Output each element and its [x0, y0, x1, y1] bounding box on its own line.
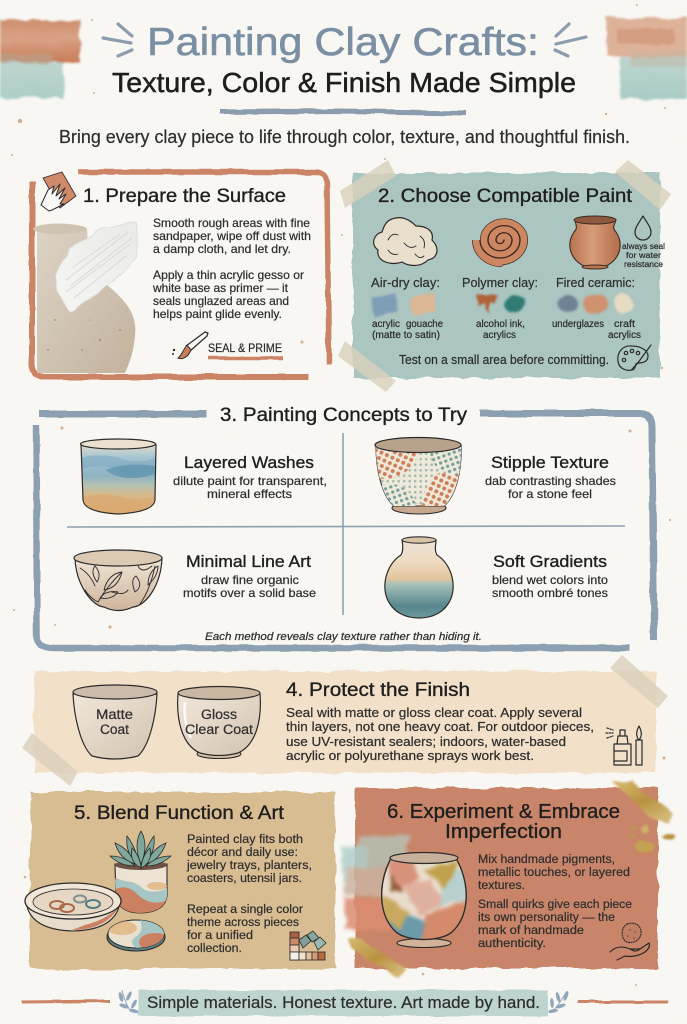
description	[173, 474, 327, 501]
description: mineral effects	[207, 487, 292, 501]
description: draw fine organic	[201, 573, 299, 587]
tagline: Bring every clay piece to life through color, texture, and thoughtful finish.	[59, 126, 630, 147]
body text: a damp cloth, and let dry.	[153, 242, 291, 256]
label underline	[208, 356, 283, 360]
body text	[478, 852, 632, 950]
body text: acrylic or polyurethane sprays work best.	[286, 749, 534, 763]
title block	[59, 21, 630, 147]
description: dilute paint for transparent,	[173, 474, 327, 488]
body text	[186, 832, 312, 955]
grid dividers	[67, 433, 625, 615]
watercolor patches	[342, 836, 408, 930]
swatch captions: underglazes	[552, 319, 604, 330]
footer rule: left	[22, 1001, 110, 1002]
swatch captions: craft	[614, 319, 635, 330]
body text: jewelry trays, planters,	[186, 858, 312, 872]
panel background	[353, 173, 660, 378]
icon: coaster	[107, 920, 171, 951]
water resistance note: resistance	[624, 259, 663, 269]
body text: metallic touches, or layered	[478, 865, 630, 879]
icon: fired ceramic pot	[570, 216, 620, 269]
title accent strokes: right	[555, 24, 586, 56]
water resistance note: for water	[626, 250, 661, 260]
panel 5: blend function and art	[25, 792, 335, 969]
swatch captions: (matte to satin)	[372, 330, 440, 341]
body text: Seal with matte or gloss clear coat. Apply several	[286, 706, 582, 720]
panel background	[34, 671, 656, 773]
description	[485, 474, 616, 501]
body text: white base as primer — it	[152, 281, 289, 295]
paint swatches	[372, 293, 634, 317]
panel background	[30, 792, 335, 969]
heading: Layered Washes	[184, 453, 314, 472]
icon: leaf sprig right	[548, 991, 569, 1014]
heading: 5. Blend Function & Art	[74, 802, 285, 824]
heading	[387, 801, 620, 843]
heading: Minimal Line Art	[186, 552, 311, 571]
icon: spray bottle and brush	[606, 726, 642, 765]
title line: Painting Clay Crafts:	[147, 21, 539, 64]
icon: hand holding stone	[610, 923, 650, 960]
vase photo	[33, 223, 135, 373]
matte coat bowl: Matte	[96, 707, 133, 722]
white primer swipe	[55, 222, 137, 312]
body text: thin layers, not one heavy coat. For outdoor pieces,	[286, 720, 594, 734]
description: motifs over a solid base	[183, 586, 316, 600]
body text: coasters, utensil jars.	[187, 871, 302, 885]
clay type labels	[371, 275, 635, 290]
brush frame	[32, 172, 329, 377]
swatch captions	[372, 319, 641, 341]
tape pieces	[338, 160, 671, 392]
description	[183, 573, 316, 600]
icon: polymer clay coil	[476, 222, 524, 263]
seal and prime label: SEAL & PRIME	[208, 341, 282, 355]
heading: 1. Prepare the Surface	[83, 185, 286, 207]
icon: paintbrush	[172, 332, 208, 359]
body text: sandpaper, wipe off dust with	[153, 229, 311, 243]
body text: helps paint glide evenly.	[153, 307, 282, 321]
body text	[286, 706, 594, 763]
panel 1: prepare the surface	[32, 172, 329, 377]
concept: soft gradients	[385, 537, 608, 618]
footer rule: right	[578, 1000, 668, 1004]
corner watercolor swatch: left	[0, 20, 80, 98]
body text: collection.	[187, 941, 242, 955]
body text: Small quirks give each piece	[478, 897, 632, 911]
heading: Soft Gradients	[493, 552, 607, 571]
description: for a stone feel	[508, 487, 592, 501]
concept: minimal line art	[74, 550, 316, 610]
icon: layered cup	[80, 439, 158, 514]
body text: its own personality — the	[478, 910, 615, 924]
panel 4: protect the finish	[22, 655, 668, 786]
icon: stippled bowl	[374, 436, 462, 514]
swatch captions: acrylics	[608, 330, 641, 341]
heading: Imperfection	[445, 821, 562, 843]
heading: 2. Choose Compatible Paint	[378, 185, 633, 207]
icon: leaf bowl	[74, 550, 162, 610]
gloss clear coat bowl: Clear Coat	[185, 722, 253, 737]
body text: seals unglazed areas and	[153, 294, 289, 308]
icon: palette and brush	[618, 345, 651, 370]
body text: Mix handmade pigments,	[478, 852, 615, 866]
matte coat bowl: Coat	[100, 722, 129, 737]
icon: abstract painted pot	[382, 852, 470, 948]
concept: layered washes	[80, 439, 327, 514]
description	[492, 573, 608, 600]
swatch captions: alcohol ink,	[476, 319, 525, 330]
swatch captions: gouache	[406, 319, 444, 330]
body text: textures.	[478, 878, 525, 892]
heading: 4. Protect the Finish	[286, 679, 470, 701]
gloss clear coat bowl: Gloss	[201, 707, 237, 722]
icon: hand with sandpaper	[41, 172, 76, 211]
water resistance note: always seal	[622, 241, 665, 251]
icon: ombre vase	[385, 537, 453, 618]
corner watercolor swatch: right	[606, 18, 687, 99]
description: dab contrasting shades	[485, 474, 616, 488]
matte coat bowl	[73, 685, 157, 759]
swatch captions: acrylics	[483, 330, 516, 341]
icon: succulent planter	[110, 831, 171, 920]
heading: 6. Experiment & Embrace	[387, 801, 620, 823]
swatch captions: acrylic	[372, 319, 400, 330]
clay type labels: Polymer clay:	[462, 275, 538, 290]
footer	[22, 990, 668, 1016]
body text: décor and daily use:	[187, 845, 298, 859]
body text: Smooth rough areas with fine	[153, 216, 310, 230]
heading: Stipple Texture	[491, 453, 609, 472]
heading: 3. Painting Concepts to Try	[220, 404, 467, 426]
description: blend wet colors into	[492, 573, 608, 587]
body text: theme across pieces	[187, 915, 299, 929]
body text	[152, 216, 311, 321]
body text: authenticity.	[478, 936, 546, 950]
water resistance note	[622, 241, 665, 269]
panel 2: choose compatible paint	[338, 160, 671, 392]
body text: mark of handmade	[478, 923, 584, 937]
body text: Apply a thin acrylic gesso or	[153, 268, 304, 282]
gold foil accents	[347, 781, 674, 978]
clay type labels: Air-dry clay:	[371, 275, 440, 290]
underline brush stroke	[219, 111, 466, 113]
icon: leaf sprig left	[118, 990, 139, 1014]
subtitle: Texture, Color & Finish Made Simple	[112, 67, 576, 98]
footer text: Simple materials. Honest texture. Art made by hand.	[147, 993, 540, 1012]
title accent strokes: left	[103, 24, 132, 56]
panel background	[355, 788, 658, 968]
body text: use UV-resistant sealers; indoors, water-based	[286, 735, 566, 749]
panel 3: painting concepts to try	[36, 404, 654, 648]
icon: water drop	[635, 216, 651, 240]
icon: color swatch book	[290, 931, 326, 960]
body text: for a unified	[187, 928, 253, 942]
brush frame	[36, 413, 654, 648]
footer brush band	[138, 990, 548, 1016]
gloss clear coat bowl	[178, 686, 260, 758]
body text: Painted clay fits both	[187, 832, 303, 846]
body text: Repeat a single color	[187, 902, 303, 916]
concept: stipple texture	[374, 436, 616, 514]
panel 6: experiment and embrace imperfection	[342, 781, 674, 978]
clay type labels: Fired ceramic:	[556, 275, 635, 290]
test note: Test on a small area before committing.	[399, 353, 609, 367]
italic caption: Each method reveals clay texture rather than hiding it.	[205, 631, 482, 643]
icon: air-dry clay lump	[374, 218, 437, 266]
tape pieces	[22, 655, 668, 786]
icon: jewelry dish	[25, 883, 121, 931]
description: smooth ombré tones	[492, 586, 608, 600]
